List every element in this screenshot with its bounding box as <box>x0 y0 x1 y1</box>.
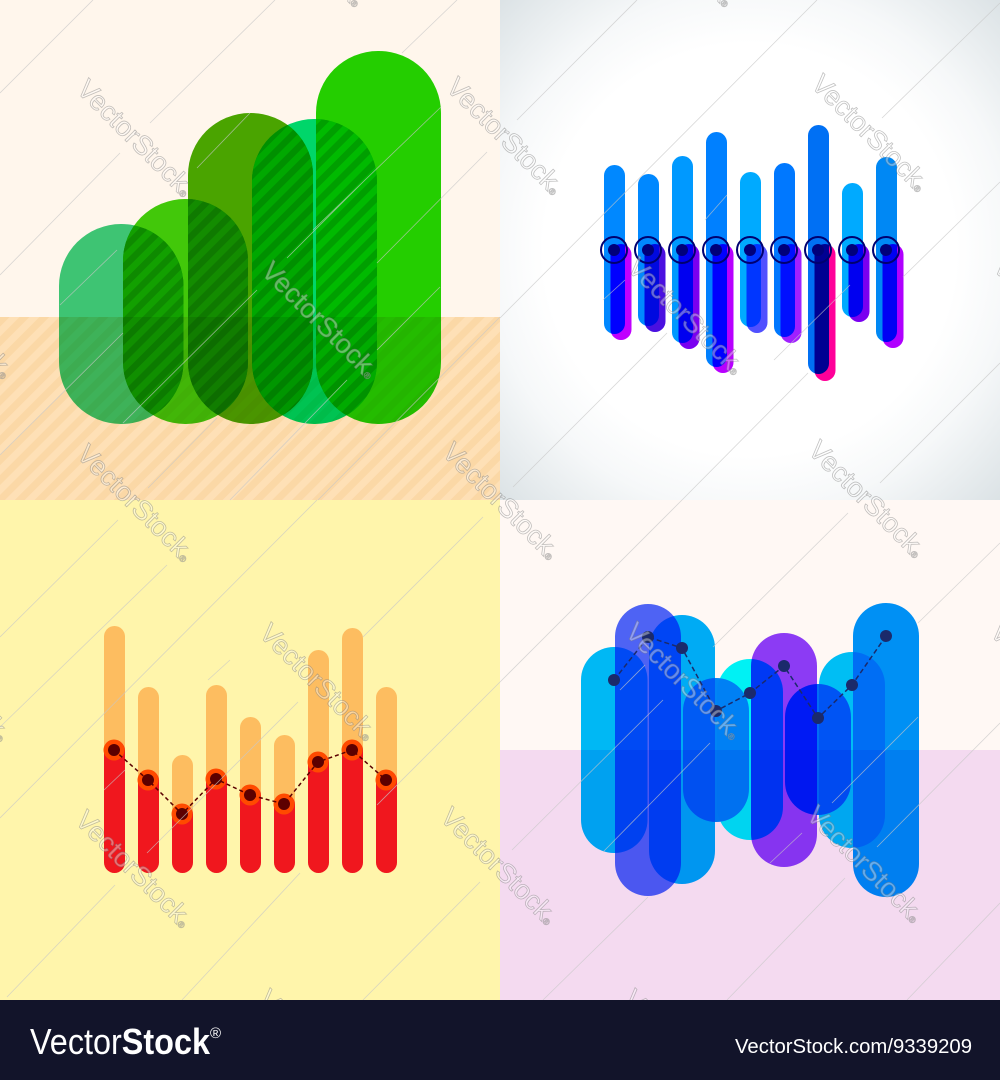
watermarks: VectorStock® <box>435 802 564 931</box>
watermarks: VectorStock® <box>806 69 935 198</box>
watermarks: VectorStock® <box>71 74 200 203</box>
panel: red and orange bars with line <box>0 500 500 1000</box>
watermarks: VectorStock® <box>622 252 751 381</box>
watermarks: VectorStock® <box>441 72 570 201</box>
footer logo: VectorStock <box>30 1021 211 1062</box>
watermarks: VectorStock® <box>71 439 200 568</box>
chart markers: ringed dots <box>601 237 899 263</box>
chart: red value bars <box>104 740 397 873</box>
watermarks: VectorStock® <box>801 800 930 929</box>
panel: blue and purple wide bars <box>500 500 1000 1000</box>
watermarks: VectorStock® <box>803 435 932 564</box>
watermarks: VectorStock® <box>254 618 383 747</box>
chart: overlapping wide bars <box>581 603 919 897</box>
watermarks: VectorStock® <box>256 256 385 385</box>
watermarks: VectorStock® <box>437 437 566 566</box>
chart: orange background bars <box>104 626 397 845</box>
line chart: dashed navy trend with markers <box>608 630 892 724</box>
panel: green overlapping bars <box>0 0 500 500</box>
footer url: VectorStock.com/9339209 <box>735 1035 972 1058</box>
watermarks: VectorStock® <box>70 805 199 934</box>
watermarks: VectorStock® <box>620 617 749 746</box>
panel: blue slider bars <box>500 0 1000 500</box>
chart: blue bars with offset lower bars <box>604 125 904 381</box>
chart: green rounded bars <box>59 51 441 430</box>
line chart: dashed trend with markers <box>104 740 396 824</box>
footer bar <box>0 1000 1000 1080</box>
registered mark: ® <box>210 1025 221 1042</box>
